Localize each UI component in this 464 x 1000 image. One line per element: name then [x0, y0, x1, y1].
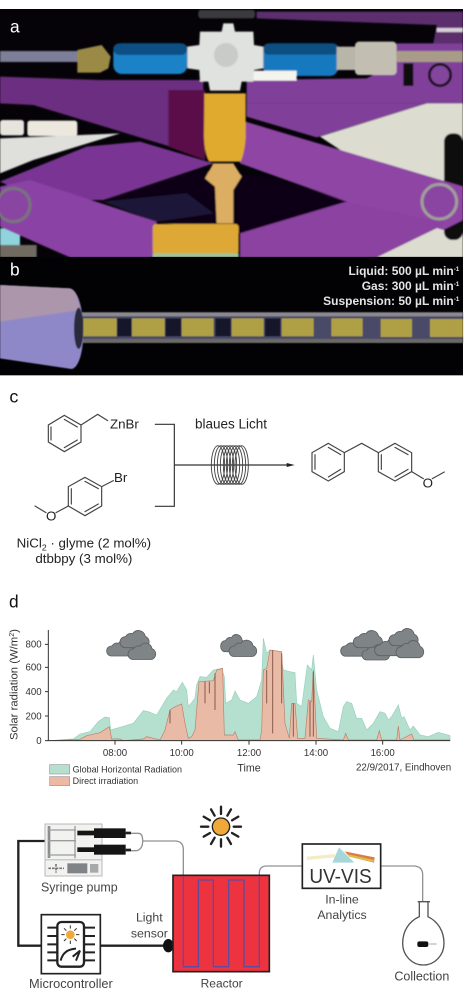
flow rates text: -1 [454, 296, 460, 303]
area: direct irradiation [48, 650, 450, 741]
label: syringe pump: Syringe pump [41, 880, 118, 894]
icon: syringe pump [45, 824, 131, 876]
label: reactor: Reactor [201, 977, 243, 991]
flow rates text: Gas: 300 µL min [362, 279, 454, 293]
label d: d [9, 592, 19, 612]
flow rates text: -1 [454, 266, 460, 273]
molecule: benzylzinc bromide [48, 414, 139, 452]
label c: c [9, 387, 18, 407]
bracket and reaction arrow [155, 424, 295, 506]
label a: a [10, 16, 20, 36]
area: global horizontal radiation [48, 638, 450, 741]
label: collection: Collection [394, 970, 449, 984]
label: in-line analytics: Analytics [317, 908, 367, 922]
legend [50, 764, 182, 786]
tubing: reactor to analytics and flask [259, 866, 423, 902]
x axis tick labels: 12:00 [237, 748, 261, 759]
x axis tick labels [103, 748, 395, 759]
panel b: segmented flow in tubing [0, 257, 463, 375]
icon: microcontroller [41, 915, 100, 974]
label: light sensor: Light [136, 911, 163, 925]
molecule: 4-bromoanisole: O [46, 509, 56, 524]
icon: middle clouds [221, 635, 257, 656]
y axis tick labels [26, 640, 42, 747]
y axis title: Solar radiation (W/m [8, 637, 20, 740]
connection: pump to microcontroller [18, 841, 45, 946]
x axis tick labels: 10:00 [170, 748, 194, 759]
y axis title: 2 [9, 633, 16, 637]
label: light sensor: sensor [131, 926, 168, 940]
label: light sensor [131, 911, 168, 940]
y axis tick labels: 200 [26, 711, 42, 722]
date location: 22/9/2017, Eindhoven [356, 763, 451, 774]
panel d: solar radiation chart [8, 592, 451, 786]
x axis tick labels: 16:00 [371, 748, 395, 759]
x axis title: Time [237, 762, 261, 774]
molecule: product [312, 443, 444, 490]
chart axes [45, 630, 450, 745]
y axis tick labels: 0 [36, 736, 42, 747]
connection: microcontroller to sensor [100, 942, 167, 949]
y axis tick labels: 800 [26, 640, 42, 651]
flow rates text: Suspension: 50 µL min [323, 294, 454, 308]
icon: sun [201, 807, 241, 847]
tubing: syringe pump to reactor [125, 833, 183, 877]
flow rates text [323, 264, 460, 308]
legend: Direct irradiation [73, 776, 138, 786]
icon: left clouds [107, 631, 156, 659]
icon: UV-VIS box: UV-VIS [309, 865, 372, 888]
label: in-line analytics [317, 893, 367, 922]
label b: b [10, 260, 20, 280]
catalyst text [17, 536, 151, 566]
icon: coil reactor [211, 446, 248, 484]
y axis tick labels: 400 [26, 687, 42, 698]
catalyst text: NiCl [17, 536, 42, 551]
spikes in direct irradiation [170, 650, 313, 737]
flow rates text: -1 [454, 281, 460, 288]
molecule: 4-bromoanisole: Br [114, 470, 128, 485]
panel e: flow setup diagram [18, 807, 449, 991]
catalyst text: · glyme (2 mol%) [47, 536, 151, 551]
label: microcontroller: Microcontroller [29, 976, 114, 991]
x axis tick labels: 08:00 [103, 748, 127, 759]
reactor [173, 875, 269, 972]
x axis tick labels: 14:00 [304, 748, 328, 759]
molecule: product: O [423, 475, 433, 490]
panel c: reaction scheme [9, 387, 444, 566]
catalyst text: 2 [42, 543, 47, 553]
legend: Global Horizontal Radiation [73, 764, 182, 774]
panel a: photo of gas-liquid mixer on purple lab jack [0, 9, 463, 257]
molecule: 4-bromoanisole [35, 470, 128, 524]
flow rates text: Liquid: 500 µL min [348, 264, 454, 278]
icon: collection flask [403, 902, 444, 965]
icon: right clouds [341, 629, 424, 660]
y axis title: ) [8, 629, 20, 633]
y axis tick labels: 600 [26, 663, 42, 674]
icon: UV-VIS box [302, 844, 381, 888]
label: in-line analytics: In-line [325, 893, 359, 907]
molecule: benzylzinc bromide: ZnBr [110, 417, 139, 432]
icon: light sensor [163, 939, 174, 952]
label: blue light: blaues Licht [195, 417, 267, 432]
catalyst text: dtbbpy (3 mol%) [35, 551, 132, 566]
